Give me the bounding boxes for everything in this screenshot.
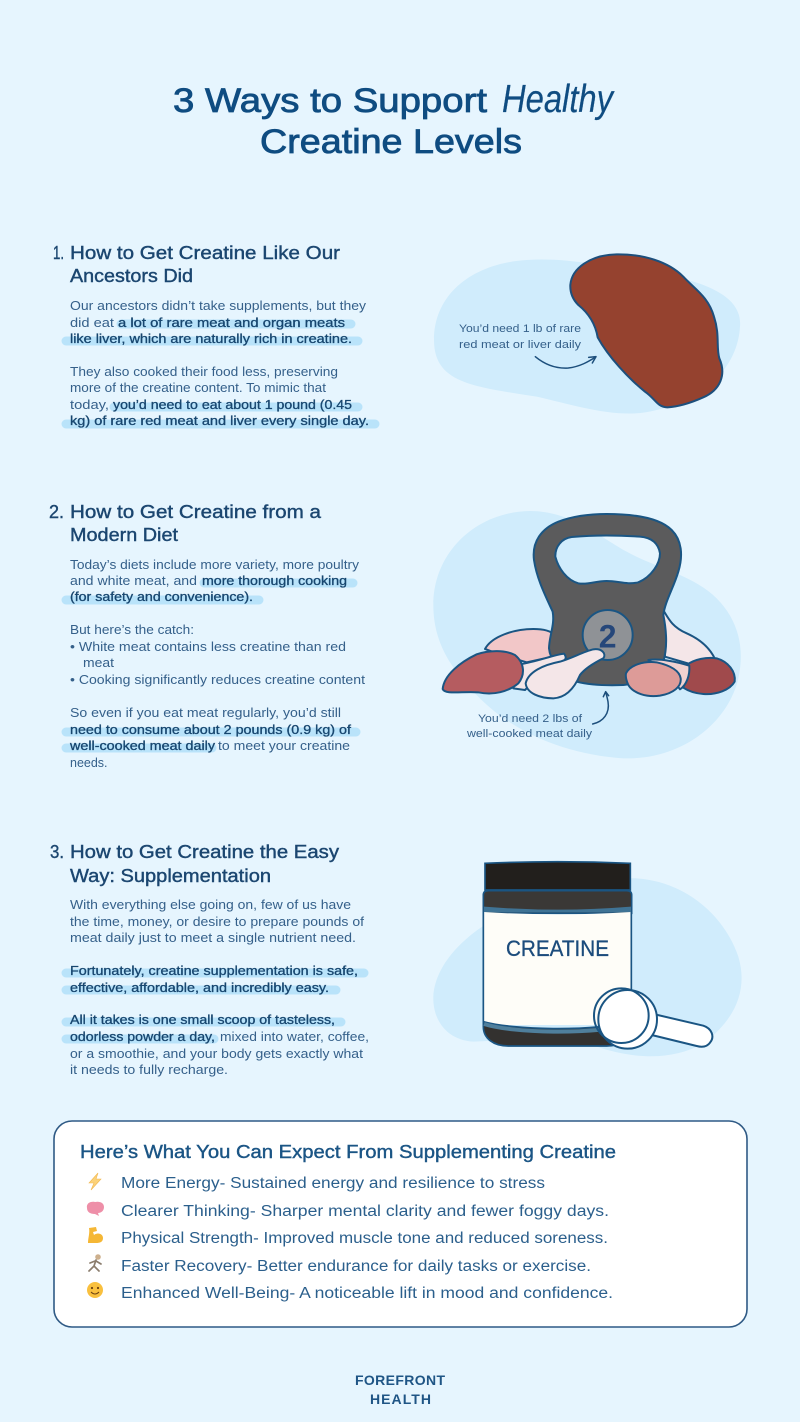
heading: section 1 — [53, 243, 340, 286]
heading: section 2 — [49, 502, 322, 545]
text block: section 1 body: like liver, which are naturally rich in creatine. — [70, 332, 352, 346]
arrow to meat — [593, 692, 609, 724]
jar side outline — [483, 912, 631, 1023]
panel: section 1 text — [53, 243, 375, 428]
benefit: thinking: Clearer Thinking- Sharper mental clarity and fewer foggy days. — [121, 1203, 609, 1220]
text block: section 2 body: needs. — [70, 756, 108, 770]
illustration: liver — [434, 254, 740, 414]
text block: section 3 body: the time, money, or desire to prepare pounds of — [70, 915, 365, 929]
text block: section 3 body: meat daily just to meet a single nutrient need. — [70, 931, 356, 945]
text block: section 3 body: odorless powder a day, — [70, 1030, 215, 1044]
text block: section 2 body: well-cooked meat daily — [69, 739, 216, 753]
panel: section 3 text — [50, 842, 369, 1077]
scoop inner rim — [594, 988, 649, 1043]
meat behind: right pale cut — [663, 609, 715, 665]
panel: section 2 text — [49, 502, 366, 770]
caption: liver: red meat or liver daily — [459, 339, 582, 351]
drumstick front — [526, 649, 604, 698]
kettlebell — [534, 514, 681, 685]
title: Healthy — [502, 78, 615, 121]
text block: section 3 body — [66, 898, 369, 1077]
text block: section 2 body: meat — [83, 656, 115, 670]
jar shoulder — [483, 891, 632, 913]
caption: meat: well-cooked meat daily — [466, 728, 593, 740]
text block: section 3 body: All it takes is one small scoop of tasteless, — [70, 1013, 335, 1027]
caption: meat — [466, 713, 593, 740]
scoop handle — [652, 1014, 712, 1047]
meat: pale cut middle right — [648, 660, 689, 689]
logo: HEALTH — [370, 1391, 431, 1407]
caption: liver — [459, 323, 582, 351]
text block: section 2 body: (for safety and convenience). — [70, 590, 253, 604]
heading: section 2: How to Get Creatine from a — [70, 502, 322, 522]
illustration: creatine jar and scoop — [433, 862, 742, 1056]
logo: FOREFRONT — [355, 1372, 445, 1388]
jar label — [484, 912, 631, 1025]
heading: section 3: 3. — [50, 842, 64, 862]
text block: section 2 body: Today’s diets include more variety, more poultry — [70, 558, 360, 572]
benefit: energy: More Energy- Sustained energy and resilience to stress — [121, 1175, 545, 1192]
text block: section 2 body: need to consume about 2 pounds (0.9 kg) of — [70, 723, 352, 737]
text block: section 1 body: did eat — [70, 316, 115, 330]
jar lid — [485, 862, 630, 890]
heading: section 1: Ancestors Did — [70, 266, 193, 286]
text block: section 1 body: kg) of rare red meat and liver every single day. — [70, 414, 369, 428]
scoop bowl — [598, 990, 657, 1049]
title: 3 Ways to Support — [173, 82, 488, 120]
text block: section 2 body: • Cooking significantly reduces creatine content — [70, 673, 366, 687]
kettlebell weight badge: 2 — [599, 618, 617, 654]
text block: section 3 body: With everything else going on, few of us have — [70, 898, 351, 912]
background blob 3 — [433, 878, 742, 1056]
caption: liver: You’d need 1 lb of rare — [459, 323, 581, 335]
meat behind: pale pink thigh — [485, 629, 560, 662]
title — [173, 78, 615, 161]
illustration: kettlebell and meat — [433, 511, 741, 758]
liver shape — [570, 254, 722, 407]
text block: section 2 body: and white meat, and — [70, 574, 197, 588]
text block: section 2 body: • White meat contains less creatine than red — [70, 640, 346, 654]
benefit: well-being: Enhanced Well-Being- A noticeable lift in mood and confidence. — [121, 1285, 613, 1302]
heading: section 1: 1. — [53, 243, 64, 263]
text block: section 3 body: Fortunately, creatine supplementation is safe, — [70, 964, 358, 978]
text block: section 1 body: Our ancestors didn’t take supplements, but they — [70, 299, 367, 313]
text block: section 2 body: But here’s the catch: — [70, 623, 194, 637]
jar band — [484, 907, 631, 912]
caption: meat: You’d need 2 lbs of — [478, 713, 583, 725]
logo — [355, 1372, 445, 1407]
meat: dark pink cut left — [443, 651, 523, 694]
kettlebell weight badge — [583, 610, 633, 660]
jar label text: CREATINE — [506, 936, 609, 961]
heading: section 2: 2. — [49, 502, 64, 522]
card heading: Here’s What You Can Expect From Supplementing Creatine — [80, 1142, 616, 1162]
text block: section 1 body: They also cooked their food less, preserving — [70, 365, 338, 379]
text block: section 2 body: more thorough cooking — [202, 574, 347, 588]
benefit: recovery: Faster Recovery- Better endurance for daily tasks or exercise. — [121, 1258, 591, 1275]
drumstick behind — [513, 654, 566, 690]
text block: section 1 body: more of the creatine content. To mimic that — [70, 381, 327, 395]
background blob 2 — [433, 511, 741, 758]
background blob 1 — [434, 260, 740, 414]
title: Creatine Levels — [260, 123, 522, 161]
jar base — [483, 1022, 632, 1046]
text block: section 1 body: a lot of rare meat and organ meats — [118, 316, 345, 330]
meat: pink cut middle — [626, 662, 681, 696]
meat: dark red right — [683, 658, 735, 694]
text block: section 2 body: So even if you eat meat regularly, you’d still — [70, 706, 341, 720]
text block: section 1 body — [66, 299, 375, 428]
heading: section 3 — [50, 842, 339, 886]
text block: section 3 body: mixed into water, coffee, — [220, 1030, 369, 1044]
jar base band — [484, 1024, 631, 1032]
heading: section 3: Way: Supplementation — [70, 866, 271, 886]
panel: benefits card — [54, 1121, 747, 1327]
text block: section 3 body: or a smoothie, and your body gets exactly what — [70, 1047, 364, 1061]
benefit: strength: Physical Strength- Improved muscle tone and reduced soreness. — [121, 1230, 608, 1247]
text block: section 2 body: to meet your creatine — [218, 739, 350, 753]
text block: section 1 body: you’d need to eat about 1 pound (0.45 — [113, 398, 352, 412]
text block: section 3 body: it needs to fully recharge. — [70, 1063, 228, 1077]
text block: section 1 body: today, — [70, 398, 109, 412]
heading: section 3: How to Get Creatine the Easy — [70, 842, 339, 862]
text block: section 3 body: effective, affordable, and incredibly easy. — [70, 981, 329, 995]
text block: section 2 body — [66, 558, 366, 770]
arrow to liver — [535, 357, 596, 368]
heading: section 1: How to Get Creatine Like Our — [70, 243, 340, 263]
heading: section 2: Modern Diet — [70, 525, 178, 545]
